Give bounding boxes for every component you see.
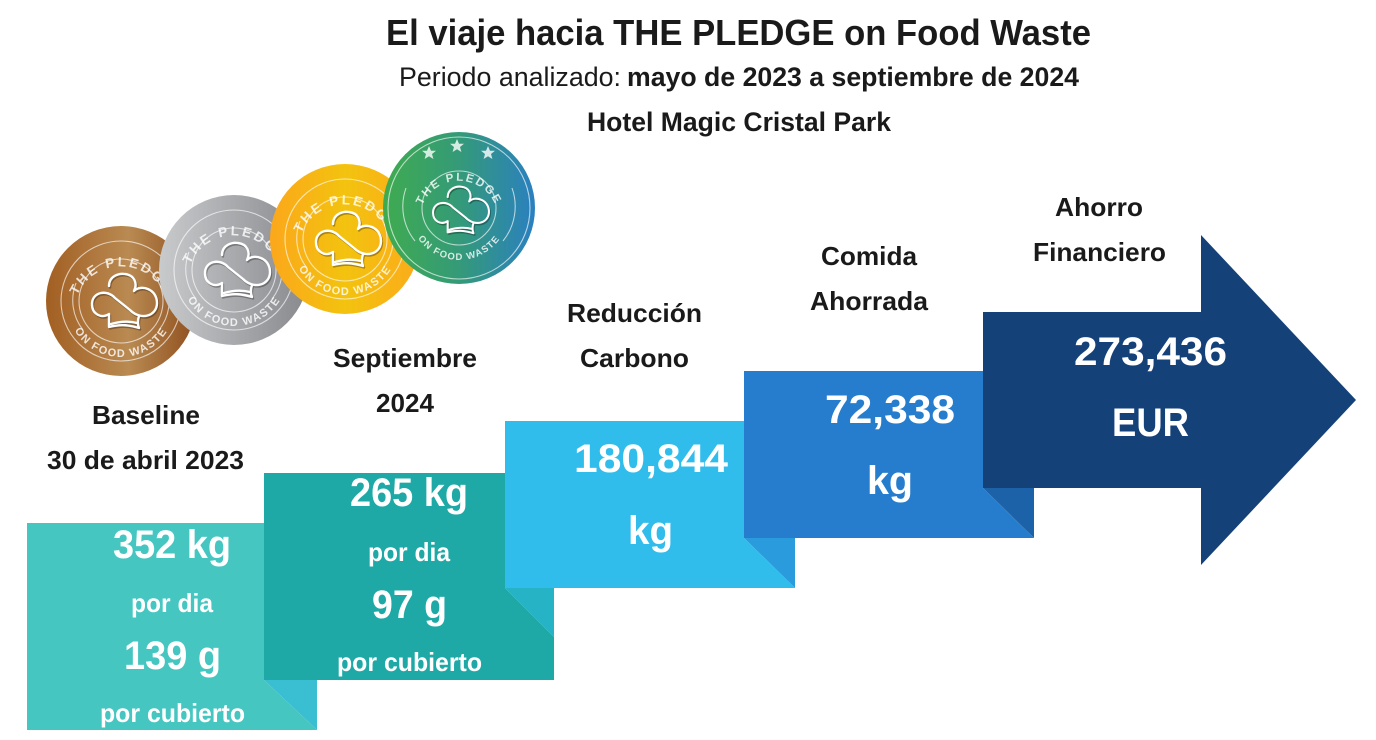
- title: El viaje hacia THE PLEDGE on Food Waste: [386, 12, 1091, 53]
- icon: green three-star medal: [383, 132, 535, 284]
- step 1 panel: baseline: [27, 523, 317, 730]
- value: 180,844: 180,844: [574, 437, 729, 481]
- label: Comida Ahorrada: Comida: [821, 241, 918, 271]
- value: 139 g: 139 g: [124, 634, 221, 678]
- hotel name: Hotel Magic Cristal Park: [587, 107, 892, 137]
- unit: kg: kg: [867, 459, 913, 503]
- subtitle: period analysed: mayo de 2023 a septiembre de 2024: [627, 62, 1079, 92]
- label: Reducción Carbono: Reducción: [567, 298, 702, 328]
- label: Reducción Carbono: [567, 298, 702, 373]
- label: por cubierto: por cubierto: [100, 698, 245, 728]
- icon: silver medal: ON FOOD WASTE: [189, 296, 280, 326]
- label: Comida Ahorrada: [810, 241, 929, 316]
- subtitle: period analysed: [399, 62, 1079, 92]
- label: Ahorro Financiero: [1033, 192, 1166, 267]
- icon: gold medal: ON FOOD WASTE: [300, 266, 391, 295]
- value: 273,436: 273,436: [1074, 330, 1227, 374]
- label: por cubierto: por cubierto: [337, 647, 482, 677]
- label: Septiembre 2024: Septiembre: [333, 343, 477, 373]
- icon: silver medal: THE PLEDGE: [182, 226, 271, 262]
- label: Septiembre 2024: 2024: [376, 388, 435, 418]
- step 2 panel: septiembre 2024: [264, 471, 554, 680]
- label: Septiembre 2024: [333, 343, 477, 418]
- icon: silver medal: [159, 195, 302, 345]
- label: Baseline: 30 de abril 2023: [47, 445, 244, 475]
- value: 72,338: 72,338: [825, 388, 955, 432]
- subtitle: period analysed: Periodo analizado:: [399, 62, 621, 92]
- label: Baseline: Baseline: [92, 400, 200, 430]
- icon: bronze medal: THE PLEDGE: [69, 257, 162, 293]
- icon: bronze medal: [46, 226, 190, 376]
- value: 352 kg: 352 kg: [113, 523, 231, 567]
- label: Ahorro Financiero: Ahorro: [1055, 192, 1143, 222]
- unit: EUR: EUR: [1112, 401, 1189, 445]
- label: por dia: por dia: [368, 537, 451, 567]
- label: Baseline: [47, 400, 244, 475]
- unit: kg: kg: [628, 509, 673, 553]
- icon: green three-star medal: ON FOOD WASTE: [419, 236, 500, 260]
- value: 97 g: 97 g: [372, 583, 447, 627]
- label: Comida Ahorrada: Ahorrada: [810, 286, 929, 316]
- label: por dia: por dia: [131, 588, 214, 618]
- step 4 fold: [983, 488, 1034, 538]
- step 2 fold: [505, 588, 554, 637]
- icon: gold medal: [270, 164, 414, 314]
- step 1 fold: [264, 680, 317, 730]
- label: Reducción Carbono: Carbono: [580, 343, 689, 373]
- icon: bronze medal: ON FOOD WASTE: [76, 328, 167, 357]
- step 3 panel: carbon reduction: [505, 421, 795, 588]
- icon: green three-star medal: THE PLEDGE: [415, 172, 502, 204]
- value: 265 kg: 265 kg: [350, 471, 468, 515]
- step 3 fold: [744, 538, 795, 588]
- step 4 panel: food saved: [744, 371, 1034, 538]
- label: Ahorro Financiero: Financiero: [1033, 237, 1166, 267]
- arrow: financial savings: [983, 235, 1356, 565]
- icon: gold medal: THE PLEDGE: [293, 195, 386, 231]
